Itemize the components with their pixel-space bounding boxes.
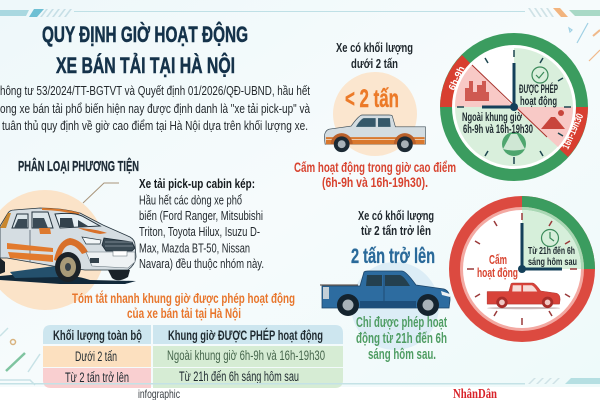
green permission text: Chỉ được phép hoạt bbox=[356, 315, 447, 331]
icon: small silver truck bbox=[324, 115, 425, 152]
vehicle description text: Xe tải pick-up cabin kép: bbox=[139, 176, 255, 191]
summary table: Khối lượng toàn bộ bbox=[53, 328, 142, 343]
front wheel bbox=[55, 252, 81, 282]
bottom-left decorative icons bbox=[0, 328, 40, 385]
green permission text: sáng hôm sau. bbox=[368, 347, 436, 363]
green permission text: động từ 21h đến 6h bbox=[356, 331, 447, 347]
green permission text bbox=[356, 315, 447, 363]
bottom decorative strip bbox=[0, 378, 600, 384]
section heading: from 2 tons: Xe có khối lượng bbox=[358, 208, 434, 223]
clock 1: under 2 tons: Ngoài khung giờ bbox=[462, 112, 523, 124]
title bbox=[42, 22, 248, 78]
summary heading: Tóm tắt nhanh khung giờ được phép hoạt động bbox=[72, 289, 295, 306]
section heading: from 2 tons bbox=[358, 208, 434, 238]
clock 2: 2 tons and up: hoạt động bbox=[477, 265, 518, 280]
peach circle with weight label bbox=[333, 72, 417, 156]
clock 1: under 2 tons: ĐƯỢC PHÉP bbox=[519, 83, 558, 96]
clock 1: under 2 tons: 16h-19h30 bbox=[561, 112, 586, 151]
intro text block: tuân thủ quy định về giờ cao điểm tại Hà Nội dựa trên khối lượng xe. bbox=[2, 118, 308, 133]
icon: check circle bbox=[532, 67, 548, 83]
weight label: 2 tons and up: 2 tấn trở lên bbox=[351, 245, 435, 268]
intro text block: Thông tư 53/2024/TT-BGTVT và Quyết định 01/2026/QĐ-UBND, hầu hết bbox=[0, 83, 310, 98]
top decorative strip bbox=[0, 8, 600, 17]
icon: blue truck bbox=[320, 271, 450, 316]
clock 1: under 2 tons bbox=[440, 33, 588, 181]
clock 1: under 2 tons: hoạt động bbox=[520, 96, 557, 108]
red restriction text bbox=[294, 159, 456, 190]
peach circle behind large truck bbox=[0, 190, 105, 310]
clock 2: 2 tons and up: Cấm bbox=[489, 252, 507, 267]
section heading: from 2 tons: từ 2 tấn trở lên bbox=[361, 223, 431, 238]
icon: city bbox=[465, 81, 489, 101]
vehicle description text: Navara) đều thuộc nhóm này. bbox=[139, 256, 264, 271]
clock 2: 2 tons and up bbox=[449, 196, 595, 342]
clock 1: under 2 tons: 6h-9h bbox=[447, 64, 468, 92]
hands bbox=[512, 63, 516, 107]
pale blue circle behind blue truck bbox=[351, 262, 439, 350]
vehicle description text: biến (Ford Ranger, Mitsubishi bbox=[139, 208, 263, 223]
summary table: Khung giờ ĐƯỢC PHÉP hoạt động bbox=[168, 328, 323, 343]
vehicle description text: Hầu hết các dòng xe phổ bbox=[139, 192, 242, 208]
title: XE BÁN TẢI TẠI HÀ NỘI bbox=[56, 53, 235, 78]
clock 2: 2 tons and up: sáng hôm sau bbox=[528, 256, 577, 268]
summary table bbox=[43, 325, 343, 388]
intro text block bbox=[0, 83, 311, 133]
vehicle description text bbox=[139, 176, 264, 271]
icon: red truck bbox=[487, 283, 560, 309]
red restriction text: (6h-9h và 16h-19h30). bbox=[322, 174, 428, 190]
icon: road with sign bbox=[541, 110, 565, 129]
section heading: under 2 tons: Xe có khối lượng bbox=[336, 40, 413, 55]
heading: vehicle classification: PHÂN LOẠI PHƯƠNG TIỆN bbox=[18, 157, 139, 175]
summary heading bbox=[72, 289, 295, 321]
clock 1: under 2 tons: 6h-9h và 16h-19h30 bbox=[463, 124, 533, 136]
callout line bbox=[83, 183, 119, 203]
summary table: Ngoài khung giờ 6h-9h và 16h-19h30 bbox=[167, 348, 325, 363]
vehicle description text: Triton, Toyota Hilux, Isuzu D- bbox=[139, 224, 260, 239]
icon: clock outline bbox=[542, 230, 558, 246]
intro text block: Trong xe bán tải phổ biến hiện nay được định danh là "xe tải pick-up" và bbox=[0, 101, 311, 116]
top-right decorative slashes bbox=[569, 23, 600, 61]
section heading: under 2 tons: dưới 2 tấn bbox=[351, 56, 398, 71]
icon: large pick-up truck bbox=[0, 208, 136, 284]
hands bbox=[520, 223, 524, 269]
vehicle description text: Max, Mazda BT-50, Nissan bbox=[139, 240, 250, 256]
summary table: Từ 21h đến 6h sáng hôm sau bbox=[179, 369, 299, 384]
peach circle with weight label: < 2 tấn bbox=[345, 85, 399, 113]
red restriction text: Cấm hoạt động trong giờ cao điểm bbox=[294, 159, 456, 175]
title: QUY ĐỊNH GIỜ HOẠT ĐỘNG bbox=[42, 22, 248, 47]
section heading: under 2 tons bbox=[336, 40, 413, 71]
icon: highway circle bbox=[502, 132, 526, 156]
summary table: Từ 2 tấn trở lên bbox=[65, 370, 129, 385]
clock 2: 2 tons and up: Từ 21h đến 6h bbox=[528, 245, 575, 257]
summary heading: của xe bán tải tại Hà Nội bbox=[127, 305, 241, 321]
summary table: Dưới 2 tấn bbox=[75, 349, 117, 364]
